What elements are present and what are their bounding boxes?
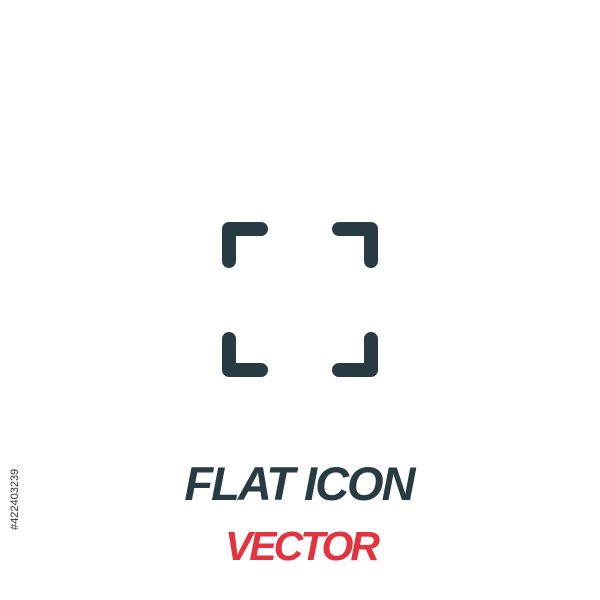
subtitle: VECTOR: VECTOR xyxy=(225,523,380,569)
icon: fullscreen corners xyxy=(229,229,371,370)
title: FLAT ICON: FLAT ICON xyxy=(184,457,417,510)
side id text: #422403239 xyxy=(9,469,21,530)
